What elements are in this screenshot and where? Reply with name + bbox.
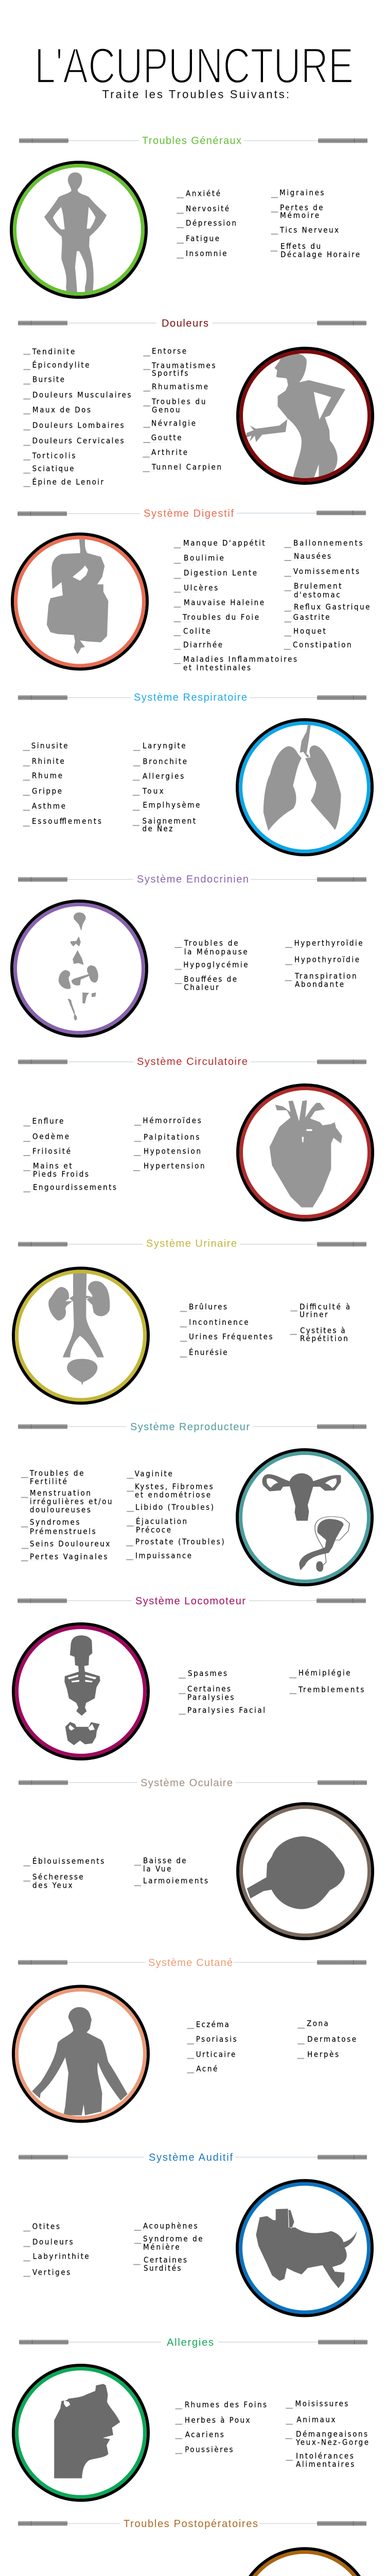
heading: Système Urinaire <box>18 1238 366 1249</box>
panel: Système Auditif <box>19 2152 372 2315</box>
list: column 2: Toux <box>142 786 164 795</box>
list: column 1: Énurésie <box>189 1347 227 1357</box>
list: column 1: Anxiété <box>186 189 220 198</box>
icon: torso in peach ring <box>13 1987 148 2122</box>
list: column 1: Troubles de <box>29 1468 84 1478</box>
list: column 2: Troubles du <box>151 397 205 406</box>
list: column 2: Syndrome de <box>143 2234 203 2243</box>
list: column 1: Herbes à Poux <box>185 2415 250 2425</box>
list: column 1 <box>174 538 297 672</box>
list: column 2: Hypothyroïdie <box>294 955 359 964</box>
list: column 2: Surdités <box>144 2264 181 2273</box>
list: column 1 <box>23 347 131 487</box>
list: column 1: Oedème <box>32 1132 69 1141</box>
panel: Allergies <box>13 2337 369 2500</box>
panel: Système Circulatoire <box>18 1056 373 1220</box>
list: column 2: Sportifs <box>152 368 188 378</box>
heading: Système Endocrinien <box>18 874 366 885</box>
list: column 2: Hypertension <box>144 1161 205 1171</box>
list: column 2: Répétition <box>300 1334 348 1343</box>
list: column 1: Engourdissements <box>33 1182 116 1192</box>
list: column 2: Hoquet <box>293 626 326 636</box>
list: column 2: Gastrite <box>293 613 329 622</box>
heading: Système Oculaire: Système Oculaire <box>141 1777 233 1789</box>
list: column 2 <box>133 2221 203 2273</box>
heading: Allergies <box>19 2337 367 2348</box>
list: column 1: douloureuses <box>30 1505 91 1514</box>
list: column 1: Dépression <box>186 218 236 228</box>
list: column 2: Vaginite <box>135 1469 172 1478</box>
icon: lungs in blue ring <box>237 720 372 855</box>
list: column 1: Tendinite <box>32 347 75 357</box>
heading: Douleurs <box>18 318 366 329</box>
list: column 2: Mémoire <box>280 211 319 220</box>
list: column 1: Rhinite <box>32 756 64 766</box>
icon: woman with back pain in dark red ring <box>238 348 373 483</box>
list: column 2: Abondante <box>295 979 344 989</box>
list: column 2: Hémiplégie <box>299 1668 350 1677</box>
icon: reproductive organs in teal ring <box>237 1450 372 1585</box>
list: column 2: Moisissures <box>295 2399 348 2408</box>
heading: Système Digestif: Système Digestif <box>144 508 234 519</box>
list: column 1: Pertes Vaginales <box>30 1552 108 1561</box>
icon: endocrine glands in purple ring <box>12 901 147 1036</box>
list: column 2 <box>143 346 221 472</box>
list: column 2: Précoce <box>136 1525 171 1534</box>
list: column 2: Brulement <box>294 581 341 590</box>
list: column 1: Urines Fréquentes <box>189 1332 273 1341</box>
list: column 1: Incontinence <box>189 1317 249 1327</box>
list: column 2: Libido (Troubles) <box>135 1502 214 1512</box>
list: column 2: Nausées <box>294 551 331 561</box>
heading: Système Auditif <box>19 2152 367 2163</box>
list: column 1: Urticaire <box>196 2049 235 2059</box>
list: column 2: Acouphènes <box>143 2221 198 2230</box>
list: column 1 <box>179 1669 265 1715</box>
list: column 2: Traumatismes <box>151 361 215 370</box>
heading: Système Respiratoire: Système Respiratoire <box>134 692 247 703</box>
list: column 2: Névralgie <box>151 418 196 428</box>
list: column 2: Tics Nerveux <box>279 225 339 234</box>
list: column 1: Enflure <box>32 1116 63 1126</box>
subtitle: Traite les Troubles Suivants: <box>102 88 289 100</box>
icon: urinary tract in yellow ring <box>13 1268 148 1403</box>
list: column 1: Maux de Dos <box>32 405 91 414</box>
list: column 2: Constipation <box>293 640 351 649</box>
list: column 1: Douleurs Cervicales <box>32 436 124 445</box>
list: column 2: et endométriose <box>135 1490 210 1499</box>
heading: Allergies: Allergies <box>167 2337 214 2348</box>
list: column 2: Saignement <box>142 816 196 825</box>
list: column 2: Impuissance <box>135 1551 191 1560</box>
list: column 1: Labyrinthite <box>33 2251 89 2261</box>
heading: Système Cutané: Système Cutané <box>148 1957 233 1969</box>
list: column 1: Prémenstruels <box>30 1527 96 1536</box>
list: column 1: Frilosité <box>32 1147 71 1156</box>
list: column 1 <box>177 189 236 259</box>
list: column 1: Grippe <box>32 786 62 795</box>
list: column 1 <box>21 1468 112 1561</box>
heading: Système Oculaire <box>19 1777 367 1789</box>
list: column 2 <box>133 1116 205 1171</box>
list: column 2: Laryngite <box>143 741 186 750</box>
list: column 1: Douleurs Musculaires <box>32 390 131 399</box>
panel: Système Urinaire <box>13 1238 366 1403</box>
list: column 2: Herpès <box>307 2049 339 2059</box>
list: column 1: Brûlures <box>189 1302 227 1311</box>
list: column 1: Paralysies <box>187 1692 234 1702</box>
list: column 2: Alimentaires <box>296 2460 354 2469</box>
list: column 1: Digestion Lente <box>184 568 257 578</box>
list: column 1: Insomnie <box>186 249 226 258</box>
list: column 1: Seins Douloureux <box>30 1539 110 1548</box>
list: column 1 <box>23 1856 104 1890</box>
list: column 1 <box>175 2400 267 2454</box>
list: column 1: Hypoglycémie <box>183 960 248 970</box>
list: column 2 <box>285 938 362 989</box>
list: column 2: Rhumatisme <box>152 382 208 391</box>
list: column 2: Vomissements <box>293 567 359 576</box>
list: column 2: Tunnel Carpien <box>151 462 221 471</box>
list: column 2 <box>285 2399 369 2469</box>
list: column 1 <box>23 2222 89 2277</box>
panel: Système Locomoteur <box>13 1596 366 1759</box>
heading: Système Urinaire: Système Urinaire <box>146 1238 237 1249</box>
heading: Troubles Postopératoires: Troubles Postopératoires <box>124 2518 258 2530</box>
heading: Troubles Généraux <box>19 135 367 146</box>
list: column 1: Douleurs <box>32 2237 73 2246</box>
list: column 2: la Vue <box>143 1864 171 1873</box>
list: column 1: Paralysies Facial <box>187 1705 265 1715</box>
list: column 2: Difficulté à <box>300 1302 350 1311</box>
list: column 2: Baisse de <box>143 1856 186 1865</box>
list: column 1 <box>175 938 248 992</box>
list: column 2 <box>284 538 370 650</box>
icon: standing body in green ring <box>11 162 146 297</box>
list: column 2 <box>126 1469 224 1560</box>
list: column 2 <box>289 1668 364 1694</box>
list: column 2: Éjaculation <box>136 1516 187 1526</box>
list: column 2: Kystes, Fibromes <box>135 1482 213 1491</box>
list: column 1: et Intestinales <box>183 663 251 672</box>
list: column 1 <box>23 1116 116 1192</box>
list: column 1: Mains et <box>33 1161 72 1171</box>
list: column 1: Fertilité <box>30 1477 67 1486</box>
heading: Système Locomoteur <box>17 1596 366 1607</box>
icon: skeleton in magenta ring <box>13 1624 148 1759</box>
list: column 1 <box>187 2020 237 2073</box>
list: column 1: Spasmes <box>188 1669 227 1678</box>
list: column 1: Sécheresse <box>32 1872 83 1882</box>
list: column 1: Asthme <box>32 801 65 810</box>
list: column 2: Ménière <box>143 2242 180 2251</box>
list: column 2: Hémorroïdes <box>143 1116 201 1125</box>
list: column 1: Nervosité <box>186 204 229 213</box>
list: column 1: Rhumes des Foins <box>185 2400 267 2409</box>
list: column 1: Pieds Froids <box>33 1170 89 1179</box>
list: column 1: Douleurs Lombaires <box>32 420 124 430</box>
list: column 2: Entorse <box>152 346 186 355</box>
icon: surgical silhouette in brown ring <box>237 2549 372 2576</box>
panel: Système Digestif <box>12 508 370 672</box>
list: column 1: Ulcères <box>184 583 218 592</box>
list: column 1: Acariens <box>185 2430 224 2439</box>
list: column 2: Pertes de <box>280 203 323 212</box>
list: column 1: Boulimie <box>184 553 224 563</box>
panel: Douleurs <box>18 318 373 487</box>
panel: Système Cutané <box>13 1957 366 2122</box>
list: column 1: Torticolis <box>32 451 75 460</box>
list: column 2: Palpitations <box>144 1132 199 1142</box>
icon: head profile in green ring <box>13 2365 148 2500</box>
list: column 1: Certaines <box>187 1684 231 1693</box>
list: column 1: Épicondylite <box>32 360 90 370</box>
list: column 1: Troubles de <box>184 938 238 947</box>
icon: digestive organs in coral ring <box>12 534 147 669</box>
panel: Troubles Postopératoires <box>18 2518 372 2576</box>
heading: Système Locomoteur: Système Locomoteur <box>135 1596 245 1607</box>
panel: Troubles Généraux <box>11 135 367 297</box>
list: column 1: Poussières <box>185 2445 233 2454</box>
list: column 2: Intolérances <box>296 2451 354 2461</box>
list: column 2: Certaines <box>144 2255 187 2264</box>
list: column 2: Larmoiements <box>143 1876 208 1885</box>
list: column 1: la Ménopause <box>184 947 248 956</box>
list: column 2: Emplhysème <box>143 801 200 810</box>
list: column 2 <box>271 188 360 259</box>
list: column 1: Acné <box>196 2064 217 2073</box>
list: column 2: Reflux Gastrique <box>294 602 370 612</box>
list: column 2: Décalage Horaire <box>280 250 360 259</box>
list: column 1: Diarrhée <box>183 640 222 649</box>
heading: Douleurs: Douleurs <box>162 318 208 329</box>
heading: Système Circulatoire: Système Circulatoire <box>137 1056 248 1067</box>
list: column 1: Manque D'appétit <box>183 538 265 548</box>
heading: Système Circulatoire <box>18 1056 366 1067</box>
list: column 2: Bronchite <box>143 757 187 766</box>
heading: Système Reproducteur <box>18 1421 366 1433</box>
list: column 1: Colite <box>183 626 210 636</box>
list: column 2: Dermatose <box>307 2035 356 2044</box>
list: column 1: Psoriasis <box>196 2035 237 2044</box>
list: column 2 <box>290 1302 350 1343</box>
list: column 1: Éblouissements <box>32 1856 104 1866</box>
list: column 2: Animaux <box>296 2415 336 2424</box>
list: column 1 <box>180 1302 273 1358</box>
heading: Système Respiratoire <box>18 692 366 703</box>
icon: inner ear in blue ring <box>237 2180 372 2315</box>
list: column 1: Syndromes <box>30 1517 79 1527</box>
heading: Troubles Généraux: Troubles Généraux <box>142 135 241 146</box>
list: column 2: Ballonnements <box>293 538 362 548</box>
icon: heart in red ring <box>238 1085 373 1220</box>
list: column 2: Zona <box>307 2019 328 2028</box>
list: column 1: Eczéma <box>196 2020 229 2029</box>
list: column 2: Transpiration <box>294 971 357 980</box>
list: column 2 <box>133 741 200 834</box>
heading: Système Reproducteur: Système Reproducteur <box>130 1421 250 1433</box>
list: column 1: des Yeux <box>32 1880 73 1890</box>
panel: Système Endocrinien <box>12 874 366 1036</box>
list: column 1: Fatigue <box>186 234 219 243</box>
list: column 2: Prostate (Troubles) <box>135 1537 224 1547</box>
list: column 2: Effets du <box>280 242 321 251</box>
list: column 1: Menstruation <box>30 1488 91 1498</box>
list: column 2: Migraines <box>279 188 324 197</box>
list: column 2: Tremblements <box>298 1685 364 1694</box>
list: column 1: Essoufflements <box>32 817 101 826</box>
heading: Système Auditif: Système Auditif <box>149 2152 233 2163</box>
list: column 2: Uriner <box>300 1310 328 1319</box>
list: column 2: Démangeaisons <box>296 2429 367 2438</box>
list: column 1: Troubles du Foie <box>182 613 259 622</box>
list: column 2: Cystites à <box>300 1326 345 1335</box>
panel: Système Reproducteur <box>18 1421 372 1585</box>
heading: Troubles Postopératoires <box>18 2518 366 2530</box>
list: column 2: Goutte <box>151 433 181 442</box>
list: column 2: Arthrite <box>151 448 187 457</box>
list: column 1: Mauvaise Haleine <box>184 598 264 607</box>
list: column 1: Maladies Inflammatoires <box>183 654 297 664</box>
list: column 2: d'estomac <box>294 590 340 599</box>
list: column 1 <box>23 741 101 826</box>
list: column 1: Sinusite <box>31 741 68 750</box>
heading: Système Digestif <box>17 508 366 519</box>
panel: Système Respiratoire <box>18 692 372 855</box>
list: column 1: Bursite <box>32 375 64 384</box>
list: column 2 <box>134 1856 208 1886</box>
list: column 1: Vertiges <box>32 2267 70 2277</box>
list: column 1: Rhume <box>32 771 62 780</box>
list: column 1: Otites <box>32 2222 60 2231</box>
list: column 2: de Nez <box>142 824 172 834</box>
heading: Système Cutané <box>18 1957 366 1969</box>
list: column 1: Sciatique <box>32 464 74 473</box>
list: column 1: Chaleur <box>184 982 219 992</box>
list: column 1: Épine de Lenoir <box>32 477 103 486</box>
icon: eye in brown ring <box>238 1804 373 1939</box>
list: column 2: Yeux-Nez-Gorge <box>295 2437 369 2447</box>
list: column 2: Hypotension <box>144 1147 201 1156</box>
list: column 2 <box>297 2019 356 2059</box>
list: column 2: Allergies <box>143 771 184 781</box>
panel: Système Oculaire <box>19 1777 373 1939</box>
list: column 1: Bouffées de <box>184 974 237 984</box>
list: column 2: Genou <box>152 405 180 414</box>
list: column 1: irrégulières et/ou <box>30 1497 112 1506</box>
heading: Système Endocrinien: Système Endocrinien <box>137 874 249 885</box>
list: column 2: Hyperthyroïdie <box>294 938 362 947</box>
